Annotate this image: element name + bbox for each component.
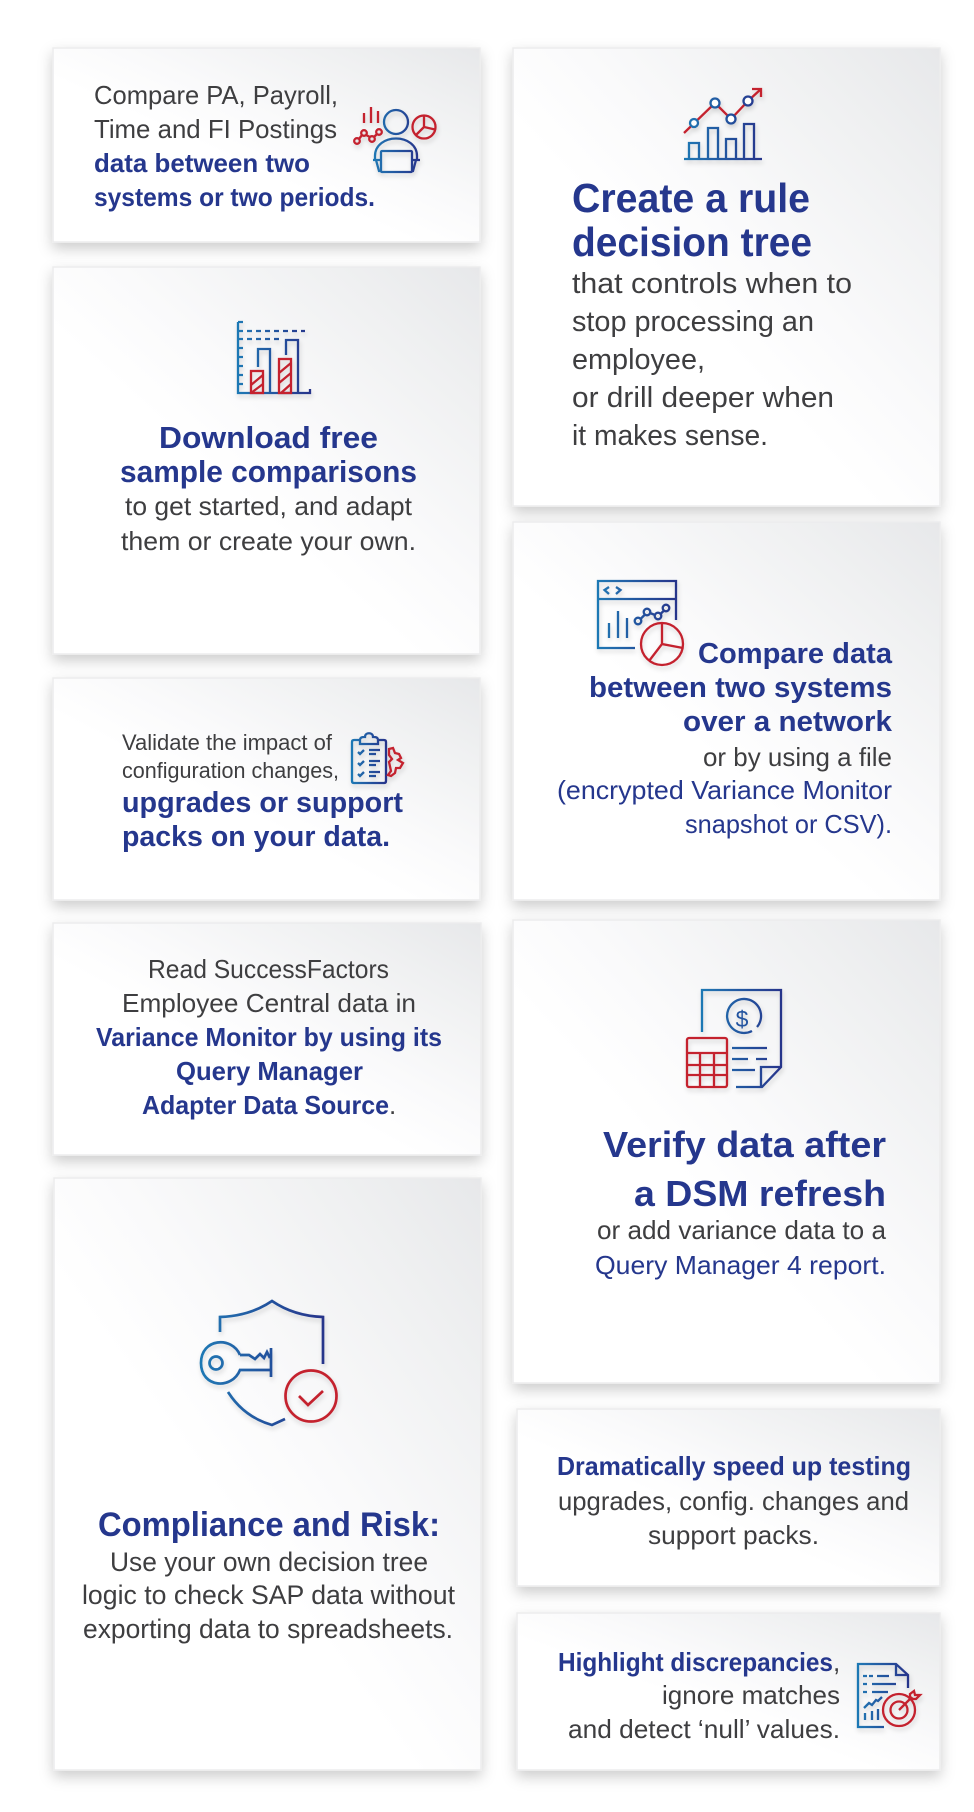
heading: download free sample comparisons: Download free (159, 420, 378, 455)
text: or by using a file: snapshot or CSV). (685, 809, 892, 839)
text: compare data between two systems or periods (94, 80, 375, 212)
text: compare data heading (589, 638, 893, 738)
text: compare data between two systems or periods: Compare PA, Payroll, (94, 80, 338, 110)
text: compare data between two systems or periods: data between two (94, 148, 310, 178)
panel: compliance and risk (54, 1178, 481, 1770)
text: or by using a file: or by using a file (703, 742, 892, 772)
text: get started and adapt (121, 491, 416, 556)
text: variance data to a report (595, 1215, 887, 1280)
text: variance data to a report: Query Manager 4 report. (595, 1250, 886, 1280)
text: highlight discrepancies (558, 1647, 840, 1744)
text: highlight discrepancies: , (833, 1647, 840, 1677)
text: SuccessFactors description: Query Manager (176, 1056, 363, 1086)
text: speed up testing: upgrades, config. changes and (558, 1486, 909, 1516)
heading: create a rule decision tree: decision tree (572, 219, 812, 265)
text: validate the impact: Validate the impact of (122, 730, 333, 755)
icon: invoice document and spreadsheet (687, 990, 781, 1087)
icon: shield with key and check (201, 1301, 336, 1425)
heading: download free sample comparisons: sample comparisons (120, 454, 417, 489)
panel: download free sample comparisons (53, 267, 480, 654)
text: stop processing description: that controls when to (572, 268, 852, 300)
icon: invoice document and spreadsheet: $ (736, 1006, 749, 1032)
icon: person at laptop with charts (354, 107, 436, 172)
heading: download free sample comparisons (120, 420, 417, 489)
text: upgrades or support packs (122, 787, 403, 853)
text: validate the impact (122, 730, 339, 783)
text: variance data to a report: or add variance data to a (597, 1215, 887, 1245)
text: or by using a file (557, 742, 892, 839)
text: get started and adapt: them or create your own. (121, 526, 416, 556)
text: SuccessFactors description: . (389, 1090, 396, 1120)
text: validate the impact: configuration changes, (122, 758, 339, 783)
text: stop processing description: stop processing an (572, 306, 814, 338)
text: SuccessFactors description: Adapter Data Source (142, 1090, 389, 1120)
text: decision tree logic (82, 1547, 455, 1644)
heading: create a rule decision tree (572, 175, 812, 265)
text: upgrades or support packs: packs on your data. (122, 821, 390, 853)
text: speed up testing: Dramatically speed up testing (557, 1451, 911, 1481)
heading: compliance and risk: Compliance and Risk: (98, 1506, 440, 1544)
panel: dramatically speed up testing (517, 1409, 940, 1586)
text: decision tree logic: logic to check SAP data without (82, 1580, 455, 1610)
text: upgrades or support packs: upgrades or support (122, 787, 403, 819)
panel: compare PA, payroll, time and FI postings (53, 48, 480, 242)
text: compare data between two systems or periods: systems or two periods. (94, 182, 375, 212)
heading: verify data after a DSM refresh (603, 1124, 886, 1214)
heading: verify data after a DSM refresh: Verify data after (603, 1124, 886, 1165)
text: SuccessFactors description: Employee Central data in (122, 988, 416, 1018)
icon: bar chart with hatched bars (238, 322, 310, 393)
panel: compare data between two systems (513, 522, 940, 900)
text: stop processing description: it makes sense. (572, 420, 768, 452)
icon: code window with charts and pie (598, 581, 683, 665)
text: stop processing description: employee, (572, 344, 705, 376)
text: or by using a file: (encrypted Variance Monitor (557, 775, 892, 805)
text: highlight discrepancies: Highlight discrepancies (558, 1647, 833, 1677)
icon: clipboard checklist with gear (352, 733, 403, 783)
text: SuccessFactors description: Variance Monitor by using its (96, 1022, 442, 1052)
panel: create a rule decision tree (513, 48, 940, 506)
text: highlight discrepancies: ignore matches (662, 1680, 840, 1710)
text: compare data heading: between two systems (589, 672, 892, 704)
icon: growth chart with arrow (684, 89, 762, 159)
text: stop processing description: or drill deeper when (572, 382, 834, 414)
text: compare data heading: Compare data (698, 638, 893, 670)
heading: verify data after a DSM refresh: a DSM refresh (634, 1173, 886, 1214)
heading: create a rule decision tree: Create a rule (572, 175, 810, 221)
panel: read SuccessFactors Employee Central data (53, 923, 481, 1155)
text: speed up testing: support packs. (648, 1520, 819, 1550)
text: compare data between two systems or periods: Time and FI Postings (94, 114, 337, 144)
text: speed up testing (557, 1451, 911, 1550)
text: compare data heading: over a network (683, 706, 893, 738)
text: SuccessFactors description (96, 954, 442, 1120)
panel: highlight discrepancies (517, 1613, 940, 1770)
text: get started and adapt: to get started, and adapt (125, 491, 413, 521)
panel: validate the impact of configuration changes (53, 678, 480, 900)
text: decision tree logic: exporting data to spreadsheets. (83, 1614, 453, 1644)
icon: report with target and dart (858, 1664, 920, 1727)
text: stop processing description (572, 268, 852, 452)
panel: verify data after a DSM refresh (513, 920, 940, 1383)
text: SuccessFactors description: Read SuccessFactors (148, 954, 389, 984)
text: highlight discrepancies: and detect ‘null’ values. (568, 1714, 840, 1744)
text: decision tree logic: Use your own decision tree (110, 1547, 428, 1577)
